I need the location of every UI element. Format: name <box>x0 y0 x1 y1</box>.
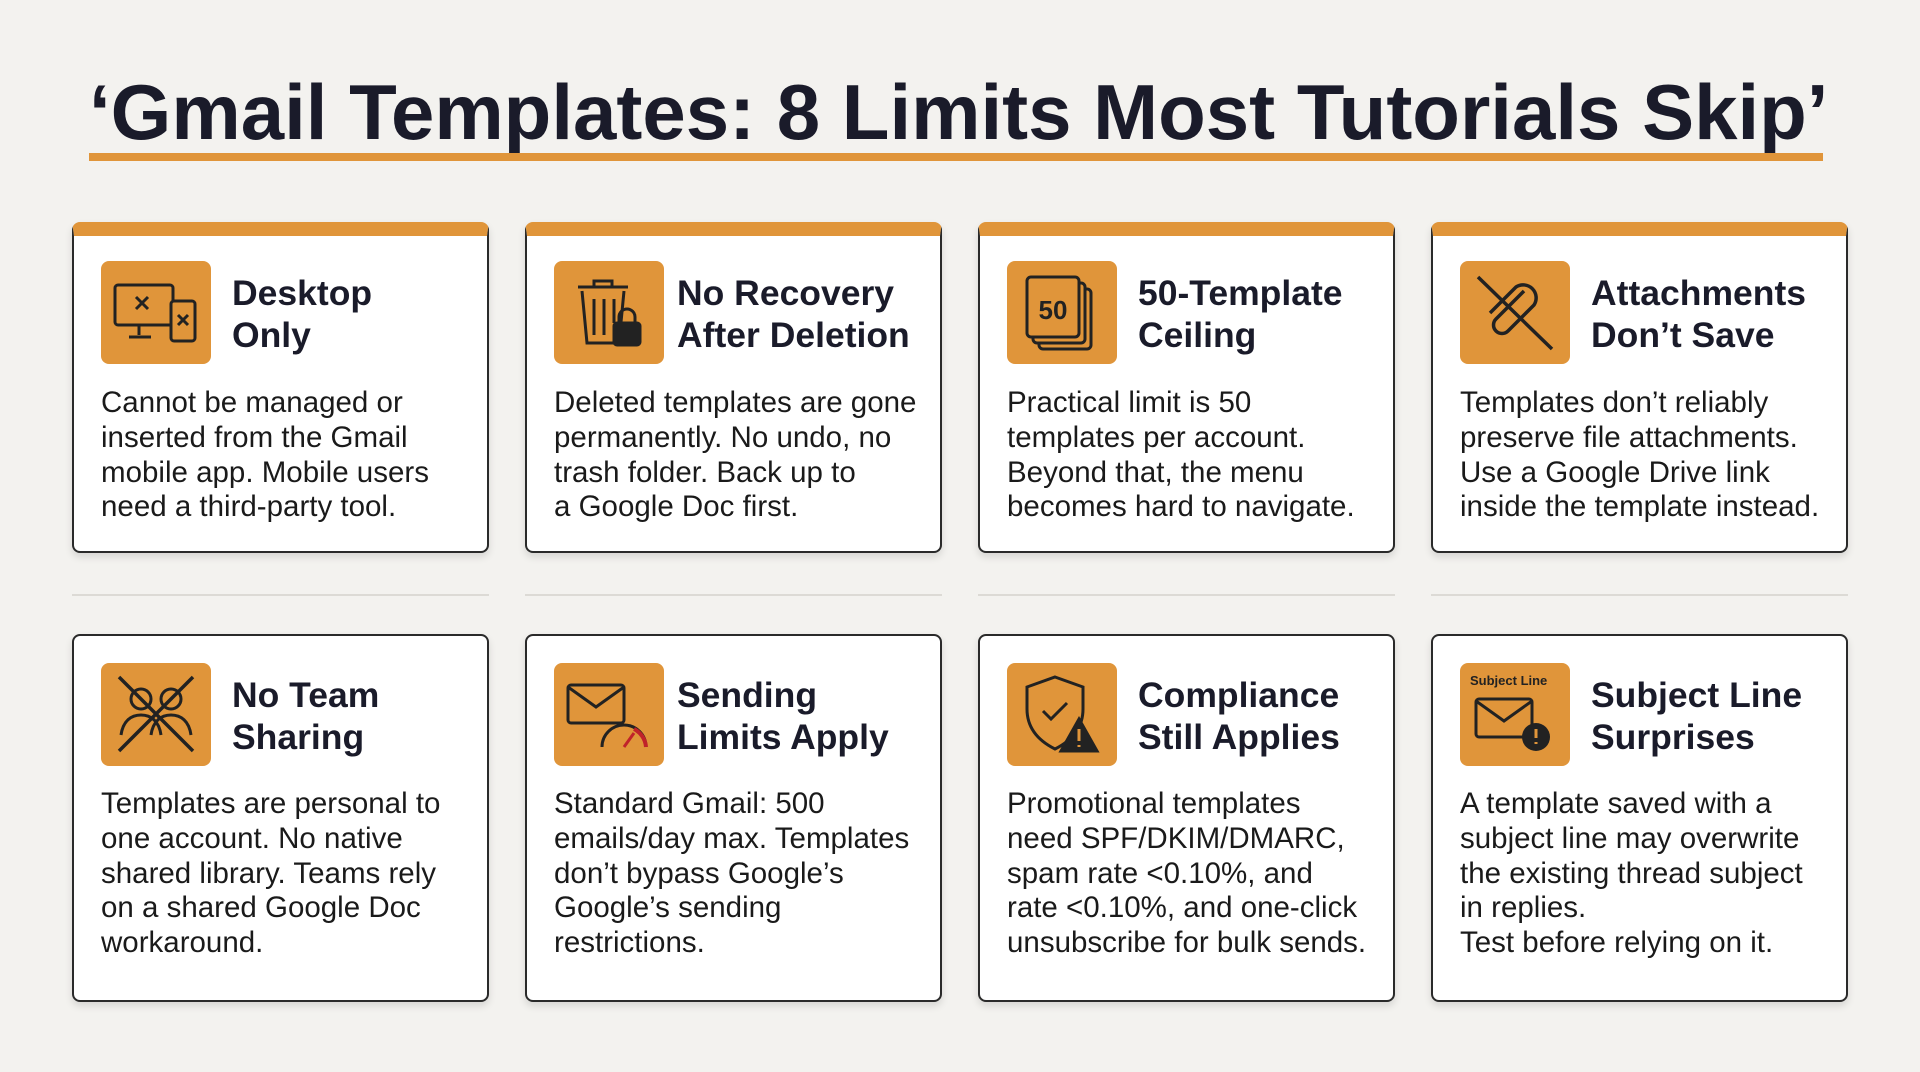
heading: Only <box>232 315 311 355</box>
text: becomes hard to navigate. <box>1007 490 1355 523</box>
heading <box>232 675 379 757</box>
text: restrictions. <box>554 926 705 959</box>
text <box>1007 386 1355 523</box>
heading <box>1138 675 1340 757</box>
text: need SPF/DKIM/DMARC, <box>1007 822 1345 855</box>
text: don’t bypass Google’s <box>554 857 844 890</box>
heading: Ceiling <box>1138 315 1256 355</box>
heading: Sending <box>677 675 817 715</box>
icon: subject line envelope: Subject Line <box>1470 673 1547 688</box>
heading: No Team <box>232 675 379 715</box>
heading: Subject Line <box>1591 675 1802 715</box>
card: attachments <box>1431 222 1848 553</box>
text: mobile app. Mobile users <box>101 456 429 489</box>
card: no recovery <box>525 222 942 553</box>
text: a Google Doc first. <box>554 490 798 523</box>
heading <box>1591 675 1802 757</box>
text <box>101 386 429 523</box>
heading: Attachments <box>1591 273 1806 313</box>
text: Test before relying on it. <box>1460 926 1773 959</box>
card: sending limits <box>525 634 942 1002</box>
heading: Compliance <box>1138 675 1339 715</box>
heading: Sharing <box>232 717 364 757</box>
text: Templates are personal to <box>101 787 440 820</box>
text: preserve file attachments. <box>1460 421 1798 454</box>
heading <box>1591 273 1806 355</box>
text: inserted from the Gmail <box>101 421 408 454</box>
heading: Desktop <box>232 273 372 313</box>
text <box>1460 386 1819 523</box>
heading: Limits Apply <box>677 717 889 757</box>
icon: paperclip slash <box>1460 261 1570 364</box>
icon: stack 50 <box>1007 261 1117 364</box>
text: Deleted templates are gone <box>554 386 916 419</box>
heading: 50-Template <box>1138 273 1343 313</box>
text: inside the template instead. <box>1460 490 1819 523</box>
text: A template saved with a <box>1460 787 1772 820</box>
text <box>101 787 440 959</box>
text: workaround. <box>101 926 263 959</box>
icon: shield warning <box>1007 663 1117 766</box>
text: emails/day max. Templates <box>554 822 909 855</box>
text <box>1460 787 1803 959</box>
text: Practical limit is 50 <box>1007 386 1251 419</box>
text: Google’s sending <box>554 891 781 924</box>
text: rate <0.10%, and one-click <box>1007 891 1357 924</box>
heading: After Deletion <box>677 315 910 355</box>
card: desktop only <box>72 222 489 553</box>
text: in replies. <box>1460 891 1586 924</box>
card: compliance <box>978 634 1395 1002</box>
icon: trash lock <box>554 261 664 364</box>
text <box>554 386 916 523</box>
text: Use a Google Drive link <box>1460 456 1770 489</box>
text: Standard Gmail: 500 <box>554 787 825 820</box>
heading <box>677 273 910 355</box>
text: permanently. No undo, no <box>554 421 891 454</box>
text: Beyond that, the menu <box>1007 456 1304 489</box>
text: trash folder. Back up to <box>554 456 856 489</box>
text: spam rate <0.10%, and <box>1007 857 1313 890</box>
text: Promotional templates <box>1007 787 1301 820</box>
heading: Surprises <box>1591 717 1755 757</box>
card: no team sharing <box>72 634 489 1002</box>
icon: subject line envelope <box>1460 663 1570 766</box>
text: the existing thread subject <box>1460 857 1803 890</box>
text: one account. No native <box>101 822 403 855</box>
icon: people crossed <box>101 663 211 766</box>
heading <box>232 273 372 355</box>
heading: Still Applies <box>1138 717 1340 757</box>
card: 50-template ceiling <box>978 222 1395 553</box>
text: subject line may overwrite <box>1460 822 1799 855</box>
icon: desktop <box>101 261 211 364</box>
text: shared library. Teams rely <box>101 857 436 890</box>
heading: No Recovery <box>677 273 894 313</box>
text: on a shared Google Doc <box>101 891 421 924</box>
text: unsubscribe for bulk sends. <box>1007 926 1366 959</box>
heading <box>1138 273 1343 355</box>
heading: Don’t Save <box>1591 315 1774 355</box>
icon: stack 50: 50 <box>1039 295 1067 325</box>
title: ‘Gmail Templates: 8 Limits Most Tutorials Skip’ <box>89 68 1828 156</box>
card: subject line <box>1431 634 1848 1002</box>
heading <box>677 675 889 757</box>
text <box>1007 787 1366 959</box>
text: Cannot be managed or <box>101 386 403 419</box>
text <box>554 787 909 959</box>
text: templates per account. <box>1007 421 1305 454</box>
text: need a third-party tool. <box>101 490 396 523</box>
text: Templates don’t reliably <box>1460 386 1768 419</box>
icon: envelope gauge <box>554 663 664 766</box>
